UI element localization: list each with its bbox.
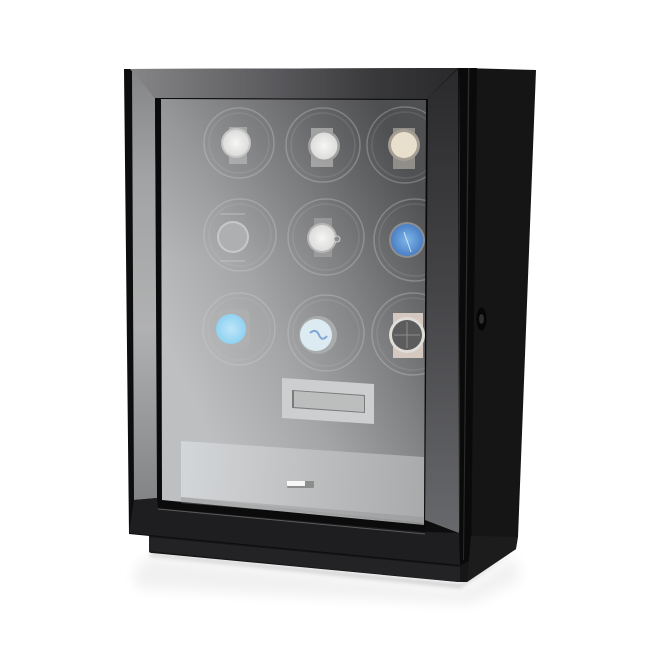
cabinet base plinth <box>149 530 516 582</box>
watch 7 <box>216 309 250 349</box>
drawer <box>181 441 424 523</box>
watch 3 <box>388 128 420 169</box>
illustration: nine-watch winder cabinet <box>124 68 536 602</box>
watch 5 <box>307 218 340 257</box>
winder rings <box>202 106 426 376</box>
drawer handle <box>287 481 314 488</box>
watch 1 <box>221 127 251 164</box>
lock button on side <box>476 308 486 330</box>
front frame <box>124 68 460 566</box>
watch 8 <box>299 316 337 354</box>
display panel <box>282 378 374 424</box>
watch 2 <box>308 128 340 167</box>
glass door panel <box>155 98 428 532</box>
floor reflection <box>134 551 520 604</box>
watch 9 <box>389 313 425 358</box>
watch 4 <box>217 214 249 261</box>
cabinet side panel <box>459 68 536 582</box>
watch 6 <box>389 222 425 258</box>
